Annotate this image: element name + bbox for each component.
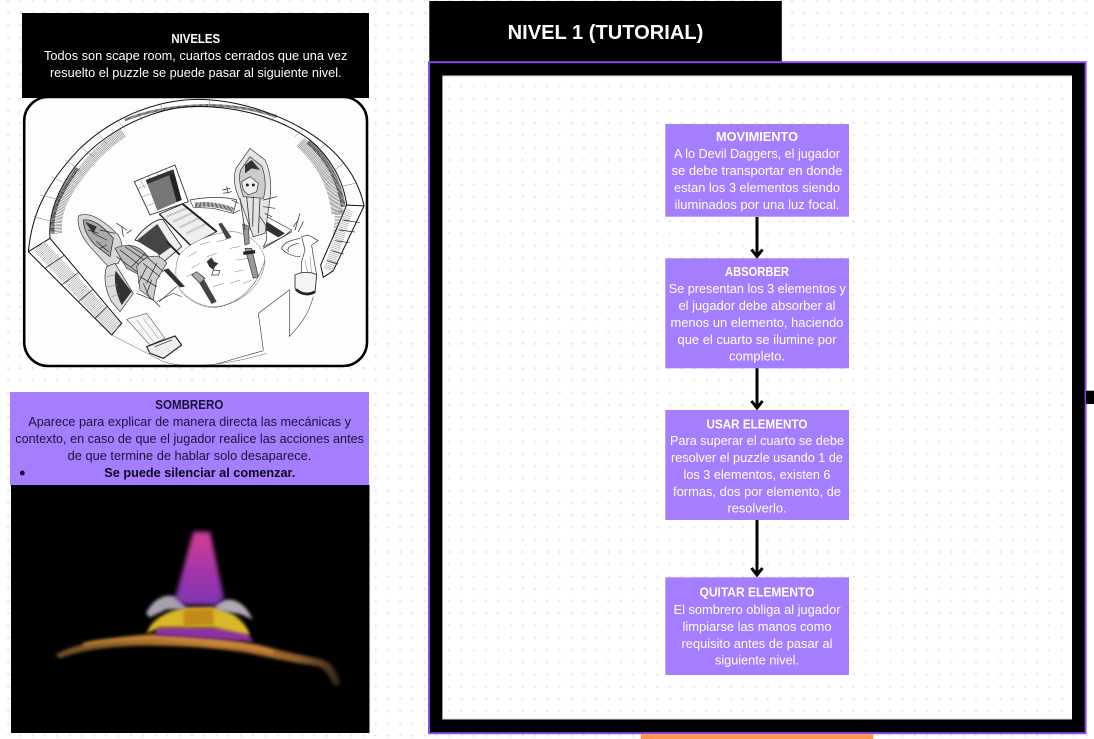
text: absorber description: que el cuarto se ilumine por (678, 332, 837, 347)
text: quitar elemento description: siguiente nivel. (715, 652, 799, 668)
panel: flowchart frame (429, 62, 1086, 733)
text: niveles description: resuelto el puzzle se puede pasar al siguiente nivel. (50, 65, 342, 80)
hat cone (175, 532, 224, 605)
step: quitar elemento (665, 577, 849, 675)
wall rim (28, 99, 364, 252)
text: absorber description: menos un elemento, haciendo (670, 315, 844, 330)
text: absorber description: Se presentan los 3 elementos y (669, 281, 846, 296)
floor emblem (207, 257, 218, 270)
heading: niveles: NIVELES (171, 31, 220, 46)
text: quitar elemento description: limpiarse las manos como (682, 619, 832, 634)
illustration frame (24, 97, 367, 366)
text: sombrero description: contexto, en caso de que el jugador realice las acciones antes (15, 431, 364, 446)
bullet note (20, 465, 295, 480)
hat gold band (147, 607, 250, 635)
text: movimiento description: iluminados por una luz focal. (674, 197, 840, 212)
right statue (282, 213, 303, 257)
connector stub: right edge (1086, 391, 1094, 404)
text: movimiento description: se debe transportar en donde (672, 163, 842, 178)
torches (198, 279, 217, 304)
text: absorber description: completo. (729, 348, 785, 364)
left statue (137, 256, 167, 300)
wall hatching (57, 133, 123, 233)
text: niveles description (44, 48, 347, 80)
step: movimiento: MOVIMIENTO (716, 129, 798, 144)
orange bar: bottom edge (641, 734, 873, 739)
step: quitar elemento: QUITAR ELEMENTO (700, 585, 814, 600)
floor disc (176, 232, 265, 307)
text: usar elemento description: los 3 elementos, existen 6 (684, 467, 830, 482)
text: usar elemento description: resolverlo. (728, 500, 786, 516)
step: absorber (665, 258, 849, 368)
back wall ledge (190, 197, 237, 213)
text: quitar elemento description: El sombrero obliga al jugador (674, 602, 841, 617)
panel: sombrero text box (10, 392, 369, 485)
step: absorber: ABSORBER (725, 264, 790, 279)
text: usar elemento description: Para superar el cuarto se debe (670, 433, 844, 448)
text: sombrero description (15, 414, 364, 463)
arrow: movimiento to absorber (752, 217, 762, 256)
right block (321, 205, 364, 277)
panel: niveles illustration (24, 97, 367, 366)
text: movimiento description (672, 146, 842, 212)
dark alcove (135, 219, 182, 263)
text: quitar elemento description (674, 602, 841, 668)
throne back (134, 165, 188, 215)
text: usar elemento description (670, 433, 844, 516)
heading: nivel 1 tutorial (429, 1, 782, 62)
panel: niveles heading box (22, 13, 369, 98)
hat brim (55, 634, 340, 685)
arrow: absorber to usar elemento (752, 368, 762, 408)
bullet note: Se puede silenciar al comenzar. (104, 465, 295, 480)
hat purple band (155, 627, 253, 642)
lower left arch (105, 263, 133, 312)
text: absorber description (669, 281, 846, 364)
step: usar elemento: USAR ELEMENTO (706, 416, 808, 431)
text: niveles description: Todos son scape room, cuartos cerrados que una vez (44, 48, 347, 63)
heading: nivel 1 tutorial: NIVEL 1 (TUTORIAL) (508, 22, 703, 44)
door outline (217, 290, 289, 364)
text: usar elemento description: resolver el puzzle usando 1 de (671, 450, 843, 465)
heading: sombrero: SOMBRERO (155, 397, 223, 412)
text: movimiento description: A lo Devil Daggers, el jugador (674, 146, 841, 161)
step: movimiento (665, 124, 849, 217)
ledge scribbles (115, 245, 148, 277)
right window (234, 148, 271, 237)
left block (28, 238, 122, 335)
arrow: usar elemento to quitar elemento (752, 520, 762, 575)
text: quitar elemento description: requisito antes de pasar al (682, 636, 833, 651)
text: movimiento description: estan los 3 elementos siendo (674, 180, 840, 195)
image: wizard hat (11, 485, 370, 733)
text: sombrero description: de que termine de hablar solo desaparece. (68, 448, 311, 463)
text: sombrero description: Aparece para explicar de manera directa las mecánicas y (28, 414, 351, 429)
hat feathers (146, 596, 253, 619)
step: usar elemento (665, 410, 849, 520)
text: usar elemento description: formas, dos por elemento, de (673, 484, 841, 499)
text: absorber description: el jugador debe absorber al (678, 298, 836, 313)
stairs (159, 204, 217, 245)
illustration: sketch of circular room (28, 99, 364, 365)
left window (78, 215, 122, 267)
